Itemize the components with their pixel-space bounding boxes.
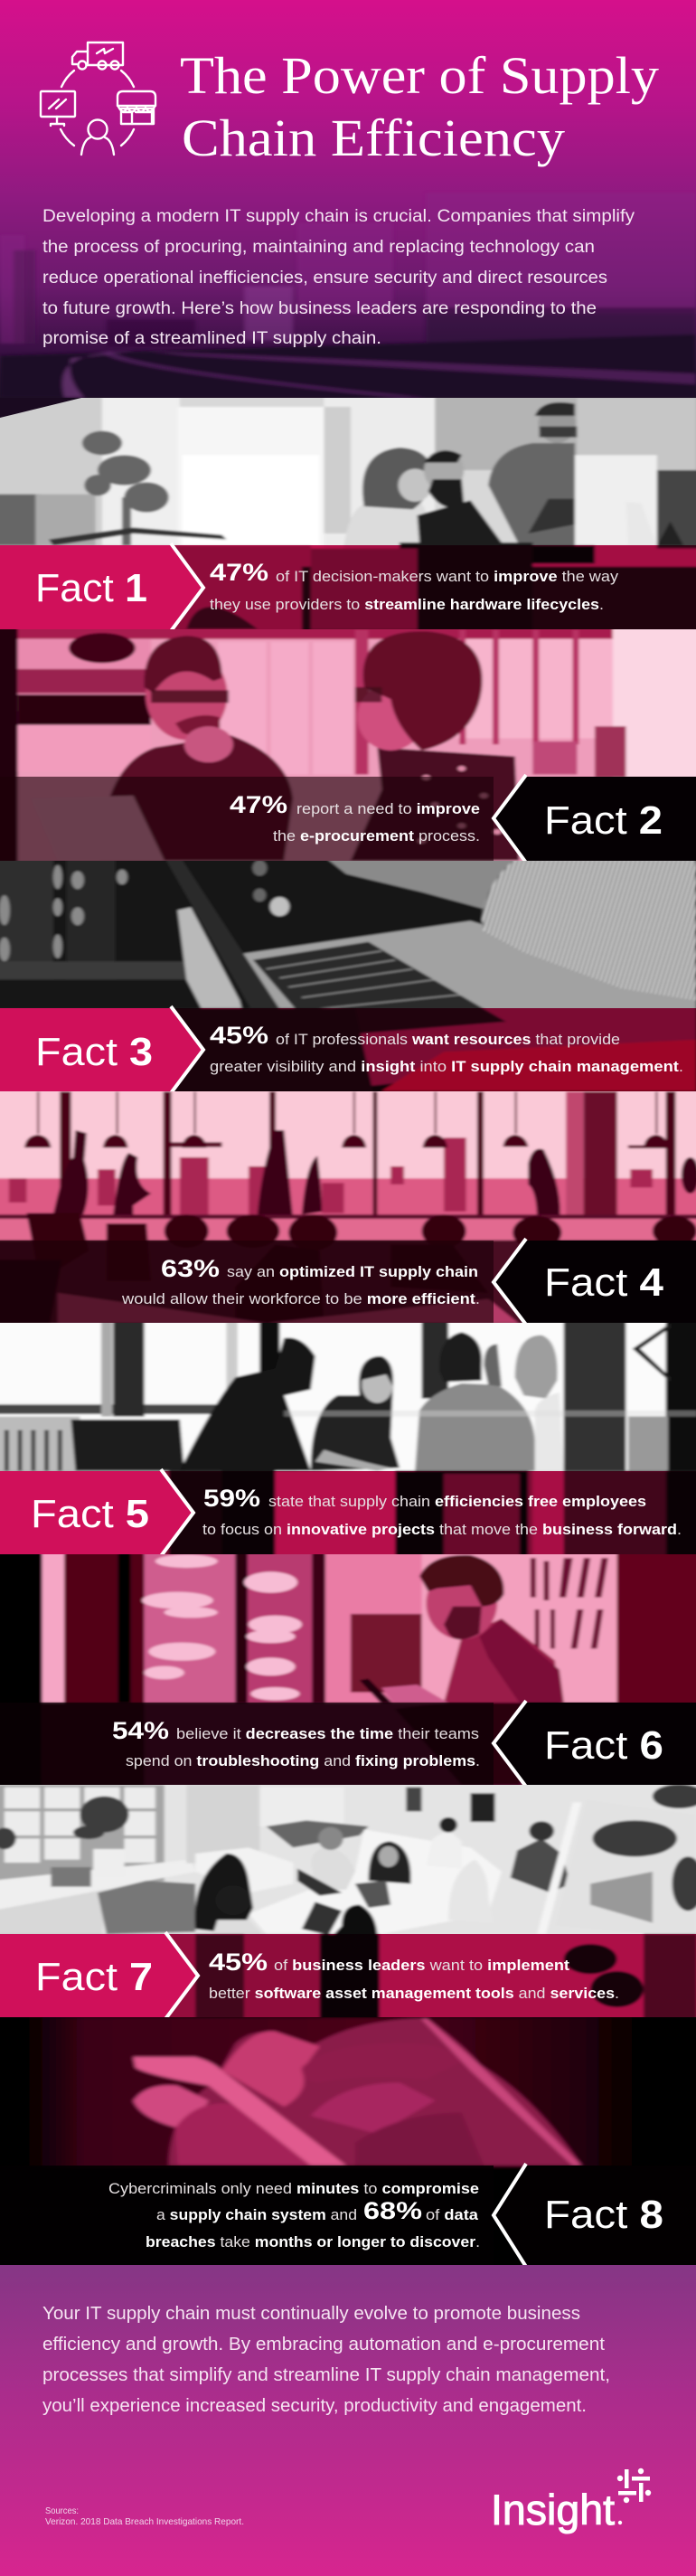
title: The Power of Supply [180, 46, 659, 105]
stat: fact 4 [121, 1255, 480, 1307]
stat: fact 8: 68% [363, 2197, 422, 2224]
photo: hands on a laptop [0, 853, 696, 1100]
band: fact 1 [171, 545, 696, 629]
chevron: fact 2 [494, 775, 526, 863]
panel: fact 6 [0, 1552, 696, 1790]
pentagon: fact 7 [0, 1934, 198, 2017]
stat: fact 5 [202, 1485, 682, 1538]
title: Chain Efficiency [182, 109, 565, 167]
panel: footer [0, 2265, 696, 2576]
stat: fact 2: 47% [230, 791, 287, 818]
label: fact 4: Fact 4 [544, 1260, 664, 1305]
stat: fact 7: better software asset management tools and services. [209, 1985, 619, 2002]
stat: fact 5: state that supply chain efficiencies free employees [268, 1493, 646, 1510]
closing text: you’ll experience increased security, productivity and engagement. [42, 2396, 587, 2416]
chevron: fact 3 [171, 1006, 203, 1093]
stat: fact 4: say an optimized IT supply chain [227, 1263, 478, 1280]
panel: fact 4 [0, 1090, 696, 1331]
band: fact 6 [0, 1703, 494, 1785]
intro text: the process of procuring, maintaining and replacing technology can [42, 238, 595, 257]
intro text [42, 207, 635, 348]
stat: fact 8: of data [426, 2206, 479, 2223]
pentagon: fact 3 [0, 1008, 203, 1091]
closing text [42, 2304, 610, 2416]
photo: team meeting by the window [0, 1320, 696, 1558]
chevron: fact 8 [494, 2164, 526, 2267]
stat: fact 4: 63% [161, 1255, 220, 1282]
sources: Verizon. 2018 Data Breach Investigations Report. [45, 2516, 244, 2527]
title [180, 46, 659, 167]
stat: fact 8 [108, 2180, 480, 2250]
logo: Insight [491, 2468, 651, 2534]
band: fact 4 [0, 1241, 494, 1323]
chevron: fact 5 [161, 1469, 193, 1556]
closing text: efficiency and growth. By embracing automation and e-procurement [42, 2335, 605, 2354]
stat: fact 3: of IT professionals want resources that provide [276, 1031, 620, 1048]
header background: city road [0, 193, 696, 398]
photo: hands holding a smartphone [29, 2017, 632, 2169]
stat: fact 6: 54% [112, 1717, 169, 1744]
label: fact 7: Fact 7 [35, 1955, 153, 1999]
chevron: fact 1 [171, 543, 203, 631]
stat: fact 6: spend on troubleshooting and fixing problems . [126, 1752, 480, 1769]
stat: fact 2: the e-procurement process. [273, 827, 480, 845]
stat: fact 1: of IT decision-makers want to improve the way [276, 568, 619, 585]
stat: fact 2 [230, 791, 480, 845]
stat: fact 4: would allow their workforce to be more efficient . [121, 1290, 480, 1307]
stat: fact 1: they use providers to streamline hardware lifecycles . [210, 596, 604, 613]
panel: fact 1 [0, 392, 696, 639]
stat: fact 1: 47% [210, 559, 268, 586]
band: fact 3 [171, 1008, 696, 1091]
photo: technician at a server rack [0, 1552, 696, 1790]
stat: fact 5: 59% [203, 1485, 260, 1512]
arrow box: fact 2 [494, 777, 696, 861]
sources [45, 2505, 244, 2527]
photo: coworking room from above [0, 1781, 696, 2023]
stat: fact 7: of business leaders want to implement [274, 1957, 569, 1974]
chevron: fact 4 [494, 1239, 526, 1325]
stat: fact 7 [209, 1949, 619, 2002]
closing text: Your IT supply chain must continually evolve to promote business [42, 2304, 580, 2324]
logo: Insight: Insight [491, 2486, 615, 2534]
photo: two colleagues talking [0, 627, 696, 868]
arrow box: fact 4 [494, 1241, 696, 1323]
intro text: promise of a streamlined IT supply chain. [42, 329, 381, 348]
band: fact 7 [165, 1934, 696, 2017]
photo: people walking in a city-view office [0, 1090, 696, 1331]
arrow box: fact 8 [494, 2166, 696, 2265]
closing text: processes that simplify and streamline IT supply chain management, [42, 2365, 610, 2385]
stat: fact 1 [210, 559, 619, 613]
stat: fact 6 [112, 1717, 480, 1769]
photo: office team at a monitor [0, 392, 696, 639]
pentagon: fact 1 [0, 545, 203, 629]
stat: fact 8: breaches take months or longer to discover . [146, 2233, 480, 2250]
intro text: reduce operational inefficiencies, ensure security and direct resources [42, 269, 607, 288]
intro text: Developing a modern IT supply chain is crucial. Companies that simplify [42, 207, 635, 226]
panel: fact 5 [0, 1320, 696, 1558]
panel: fact 2 [0, 627, 696, 868]
stat: fact 8: Cybercriminals only need minutes to compromise [108, 2180, 479, 2197]
sources: Sources: [45, 2505, 79, 2516]
band: fact 2 [0, 777, 494, 861]
pentagon: fact 5 [0, 1471, 193, 1554]
intro text: to future growth. Here’s how business leaders are responding to the [42, 299, 597, 318]
panel: fact 3 [0, 853, 696, 1100]
label: fact 8: Fact 8 [544, 2193, 663, 2237]
band: fact 5 [161, 1471, 696, 1554]
stat: fact 8: a supply chain system and [156, 2206, 357, 2223]
stat: fact 3: 45% [210, 1022, 268, 1049]
stat: fact 3 [210, 1022, 683, 1075]
panel: header [0, 0, 696, 398]
stat: fact 7: 45% [209, 1949, 268, 1976]
chevron: fact 6 [494, 1701, 526, 1787]
stat: fact 6: believe it decreases the time their teams [176, 1725, 479, 1742]
arrow box: fact 6 [494, 1703, 696, 1785]
label: fact 3: Fact 3 [35, 1030, 153, 1074]
chevron: fact 7 [165, 1932, 198, 2019]
label: fact 1: Fact 1 [35, 566, 147, 610]
label: fact 2: Fact 2 [544, 798, 663, 843]
stat: fact 5: to focus on innovative projects that move the business forward . [202, 1521, 682, 1538]
icon: supply chain cycle [41, 42, 155, 155]
label: fact 6: Fact 6 [544, 1723, 663, 1768]
label: fact 5: Fact 5 [31, 1492, 149, 1536]
panel: fact 8 [0, 2017, 696, 2267]
band: fact 8 [0, 2166, 494, 2265]
stat: fact 2: report a need to improve [296, 800, 480, 817]
panel: fact 7 [0, 1781, 696, 2023]
stat: fact 3: greater visibility and insight into IT supply chain management . [210, 1058, 683, 1075]
